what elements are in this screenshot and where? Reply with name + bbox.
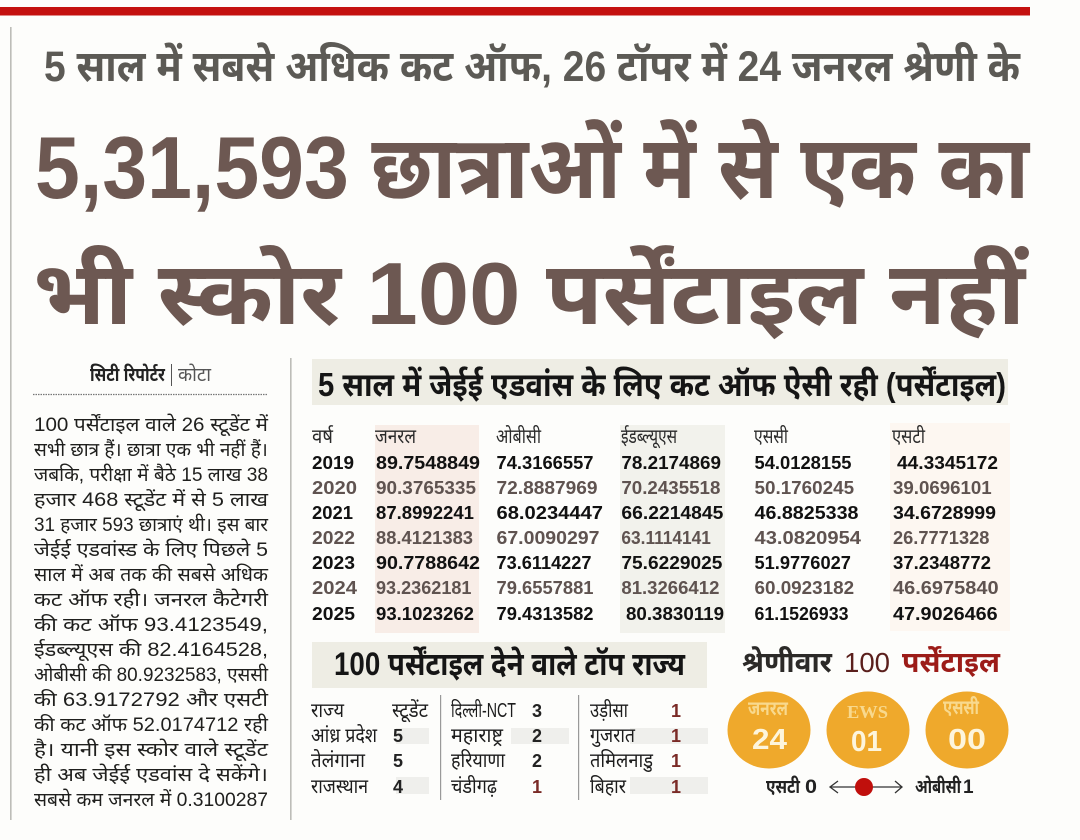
article body text: की 63.9172792 और एसटी	[34, 688, 269, 711]
category heading	[742, 645, 1001, 679]
row 2020	[312, 478, 992, 498]
row 2021: 87.8992241	[376, 503, 474, 523]
state names: दिल्ली-NCT	[451, 698, 516, 722]
state names: उड़ीसा	[590, 698, 629, 722]
row 2021: 2021	[312, 503, 353, 523]
article body text: 100 पर्सेंटाइल वाले 26 स्टूडेंट में	[34, 413, 269, 437]
category circle: SC	[926, 692, 1008, 768]
row 2019: 74.3166557	[496, 453, 594, 473]
row 2020: 50.1760245	[754, 478, 854, 498]
row 2019	[312, 453, 998, 473]
cutoff table heading: 5 साल में जेईई एडवांस के लिए कट ऑफ ऐसी रही (पर्सेंटाइल)	[318, 365, 1006, 403]
state names: तेलंगाना	[311, 748, 366, 772]
top states table	[311, 695, 708, 800]
state names: राज्य	[311, 700, 344, 722]
top red rule	[0, 7, 1030, 16]
state names: स्टूडेंट	[392, 699, 429, 723]
category heading: श्रेणीवार	[742, 645, 833, 679]
ST and OBC arrow legend	[766, 776, 974, 798]
row 2020: 90.3765335	[376, 478, 476, 498]
category circle: EWS	[826, 692, 910, 768]
row 2024: 79.6557881	[496, 578, 594, 598]
row 2023: 90.7788642	[376, 553, 480, 573]
article body text: जेईई एडवांस्ड के लिए पिछले 5	[34, 538, 268, 561]
row 2022: 43.0820954	[754, 528, 861, 548]
state names: महाराष्ट्र	[451, 725, 503, 747]
category circle: general: 24	[752, 724, 787, 756]
category circle: general	[728, 692, 810, 768]
main headline	[33, 118, 1031, 343]
state counts: 1	[532, 777, 542, 797]
row 2023: 73.6114227	[496, 553, 592, 573]
row 2022: 67.0090297	[496, 528, 600, 548]
article body text: की कट ऑफ 93.4123549,	[34, 613, 268, 636]
state counts: 1	[671, 751, 681, 771]
article body text: कट ऑफ रही। जनरल कैटेगरी	[34, 588, 269, 611]
state counts: 2	[532, 726, 542, 746]
row 2025: 47.9026466	[893, 604, 998, 624]
state names: आंध्र प्रदेश	[311, 723, 377, 747]
row 2022	[312, 528, 989, 548]
state counts: 1	[671, 777, 681, 797]
row 2025: 79.4313582	[496, 604, 594, 624]
row 2023: 37.2348772	[893, 553, 991, 573]
table column headers: ईडब्ल्यूएस	[621, 425, 677, 449]
category circle: SC: एससी	[943, 695, 980, 719]
state counts: 3	[532, 701, 542, 721]
row 2021: 68.0234447	[496, 503, 603, 523]
article body text: जबकि, परीक्षा में बैठे 15 लाख 38	[34, 463, 268, 486]
row 2022: 88.4121383	[376, 528, 473, 548]
state names: चंडीगढ़	[451, 774, 498, 798]
article body text: की कट ऑफ 52.0174712 रही	[34, 713, 269, 736]
row 2025: 93.1023262	[376, 604, 474, 624]
row 2021: 34.6728999	[893, 503, 996, 523]
category heading: पर्सेंटाइल	[902, 646, 1001, 679]
article body text: सबसे कम जनरल में 0.3100287	[34, 788, 268, 811]
article body text: ही अब जेईई एडवांस दे सकेंगे।	[34, 763, 268, 786]
table column headers: जनरल	[375, 426, 416, 448]
article body text: ओबीसी की 80.9232583, एससी	[34, 663, 269, 686]
table column headers: ओबीसी	[496, 424, 542, 448]
state names: गुजरात	[590, 725, 636, 748]
row 2024: 81.3266412	[621, 578, 719, 598]
state counts: 4	[393, 777, 403, 797]
article body text: ईडब्ल्यूएस की 82.4164528,	[34, 638, 268, 662]
category heading: 100	[844, 647, 890, 678]
row 2020: 39.0696101	[893, 478, 992, 498]
row 2024: 46.6975840	[893, 578, 999, 598]
state counts: 5	[393, 726, 403, 746]
table column headers: एससी	[754, 424, 789, 448]
article body text: सभी छात्र हैं। छात्रा एक भी नहीं हैं।	[34, 438, 268, 461]
article body text	[34, 413, 269, 811]
row 2022: 63.1114141	[621, 528, 711, 548]
state names: राजस्थान	[311, 776, 369, 798]
top states heading	[312, 642, 707, 688]
row 2024: 93.2362181	[376, 578, 472, 598]
top states heading: 100 पर्सेंटाइल देने वाले टॉप राज्य	[334, 646, 686, 682]
row 2019: 54.0128155	[754, 453, 852, 473]
state names: हरियाणा	[451, 748, 506, 772]
category circle: SC: 00	[948, 724, 986, 756]
cutoff table	[312, 423, 1010, 633]
ST and OBC arrow legend: ओबीसी	[915, 776, 961, 798]
row 2024: 2024	[312, 578, 357, 598]
row 2019: 89.7548849	[376, 453, 480, 473]
row 2023: 75.6229025	[621, 553, 722, 573]
category circle: EWS: EWS	[847, 702, 888, 722]
article body text: साल में अब तक की सबसे अधिक	[34, 563, 268, 586]
article body text: है। यानी इस स्कोर वाले स्टूडेंट	[34, 738, 269, 762]
row 2023	[312, 553, 991, 573]
row 2025	[312, 604, 998, 624]
row 2025: 2025	[312, 604, 355, 624]
row 2020: 2020	[312, 478, 357, 498]
state counts: 1	[671, 701, 681, 721]
category circle: general: जनरल	[748, 698, 789, 720]
main headline: भी स्कोर 100 पर्सेंटाइल नहीं	[33, 244, 1029, 343]
state names: बिहार	[590, 774, 627, 798]
row 2019: 78.2174869	[621, 453, 721, 473]
state names	[311, 698, 653, 798]
row 2025: 61.1526933	[754, 604, 848, 624]
row 2023: 2023	[312, 553, 355, 573]
article body text: 31 हजार 593 छात्राएं थी। इस बार	[34, 514, 269, 536]
table column headers: वर्ष	[312, 425, 334, 448]
state names: तमिलनाडु	[590, 748, 653, 773]
row 2020: 72.8887969	[496, 478, 598, 498]
state counts	[393, 701, 681, 797]
byline	[90, 363, 212, 386]
row 2024	[312, 578, 999, 598]
row 2021: 46.8825338	[754, 503, 858, 523]
row 2019: 2019	[312, 453, 354, 473]
byline: कोटा	[178, 364, 212, 386]
byline: सिटी रिपोर्टर	[90, 363, 166, 386]
row 2022: 26.7771328	[893, 528, 989, 548]
table column headers: एसटी	[892, 424, 926, 448]
ST and OBC arrow legend: 1	[963, 777, 974, 798]
ST and OBC arrow legend: 0	[805, 777, 817, 798]
state counts: 1	[671, 726, 681, 746]
row 2025: 80.3830119	[626, 604, 724, 624]
row 2022: 2022	[312, 528, 355, 548]
state counts: 2	[532, 751, 542, 771]
state counts: 5	[393, 751, 403, 771]
ST and OBC arrow legend: एसटी	[766, 776, 800, 798]
category circle: EWS: 01	[851, 726, 882, 758]
row 2021	[312, 503, 996, 523]
row 2024: 60.0923182	[754, 578, 854, 598]
row 2019: 44.3345172	[897, 453, 998, 473]
row 2021: 66.2214845	[621, 503, 723, 523]
row 2023: 51.9776027	[754, 553, 851, 573]
row 2020: 70.2435518	[621, 478, 720, 498]
article body text: हजार 468 स्टूडेंट में से 5 लाख	[34, 488, 269, 512]
table column headers	[312, 424, 926, 449]
